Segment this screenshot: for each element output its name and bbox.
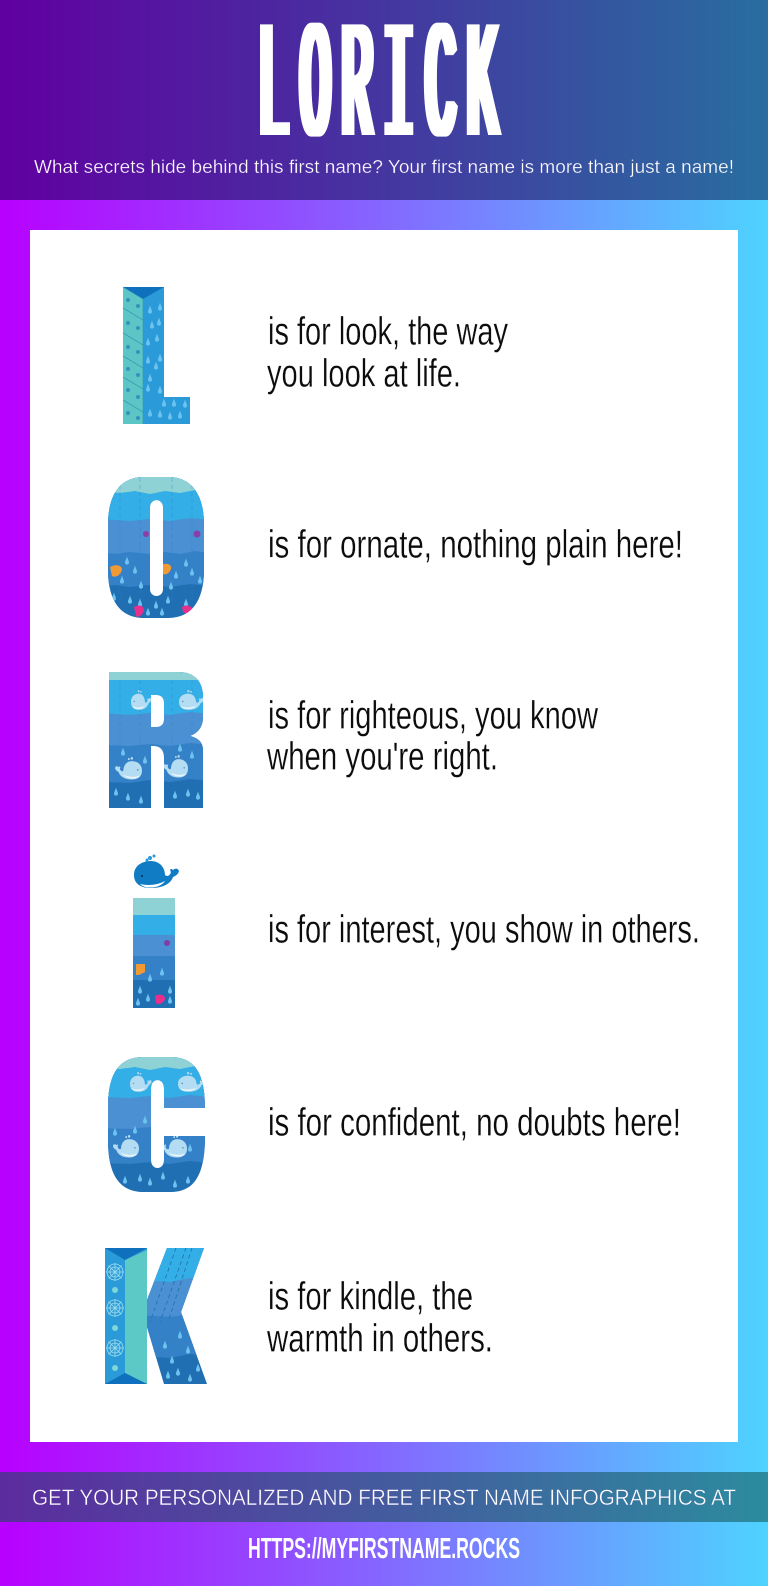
letter R xyxy=(109,672,203,808)
row text: K xyxy=(266,1276,493,1360)
header band xyxy=(0,0,768,200)
letter K xyxy=(105,1245,210,1385)
row text: L xyxy=(267,310,509,396)
letter C xyxy=(108,1057,205,1192)
footer band xyxy=(0,1472,768,1522)
row text: R: when you're right. xyxy=(266,736,498,778)
letter I xyxy=(133,898,175,1008)
title: LORICK xyxy=(258,0,498,186)
icon: whale over letter I xyxy=(134,854,179,888)
white content panel xyxy=(30,230,738,1442)
letter L xyxy=(123,287,190,424)
row text: L: you look at life. xyxy=(267,352,461,396)
subtitle: What secrets hide behind this first name? Your first name is more than just a name! xyxy=(34,156,734,177)
footer url: HTTPS://MYFIRSTNAME.ROCKS xyxy=(248,1533,520,1565)
row text: L: is for look, the way xyxy=(268,310,509,354)
row text: K: warmth in others. xyxy=(266,1318,493,1360)
row text: R: is for righteous, you know xyxy=(268,694,598,738)
row text: K: is for kindle, the xyxy=(268,1276,473,1318)
row text: R xyxy=(266,694,598,778)
letter O xyxy=(108,477,204,618)
